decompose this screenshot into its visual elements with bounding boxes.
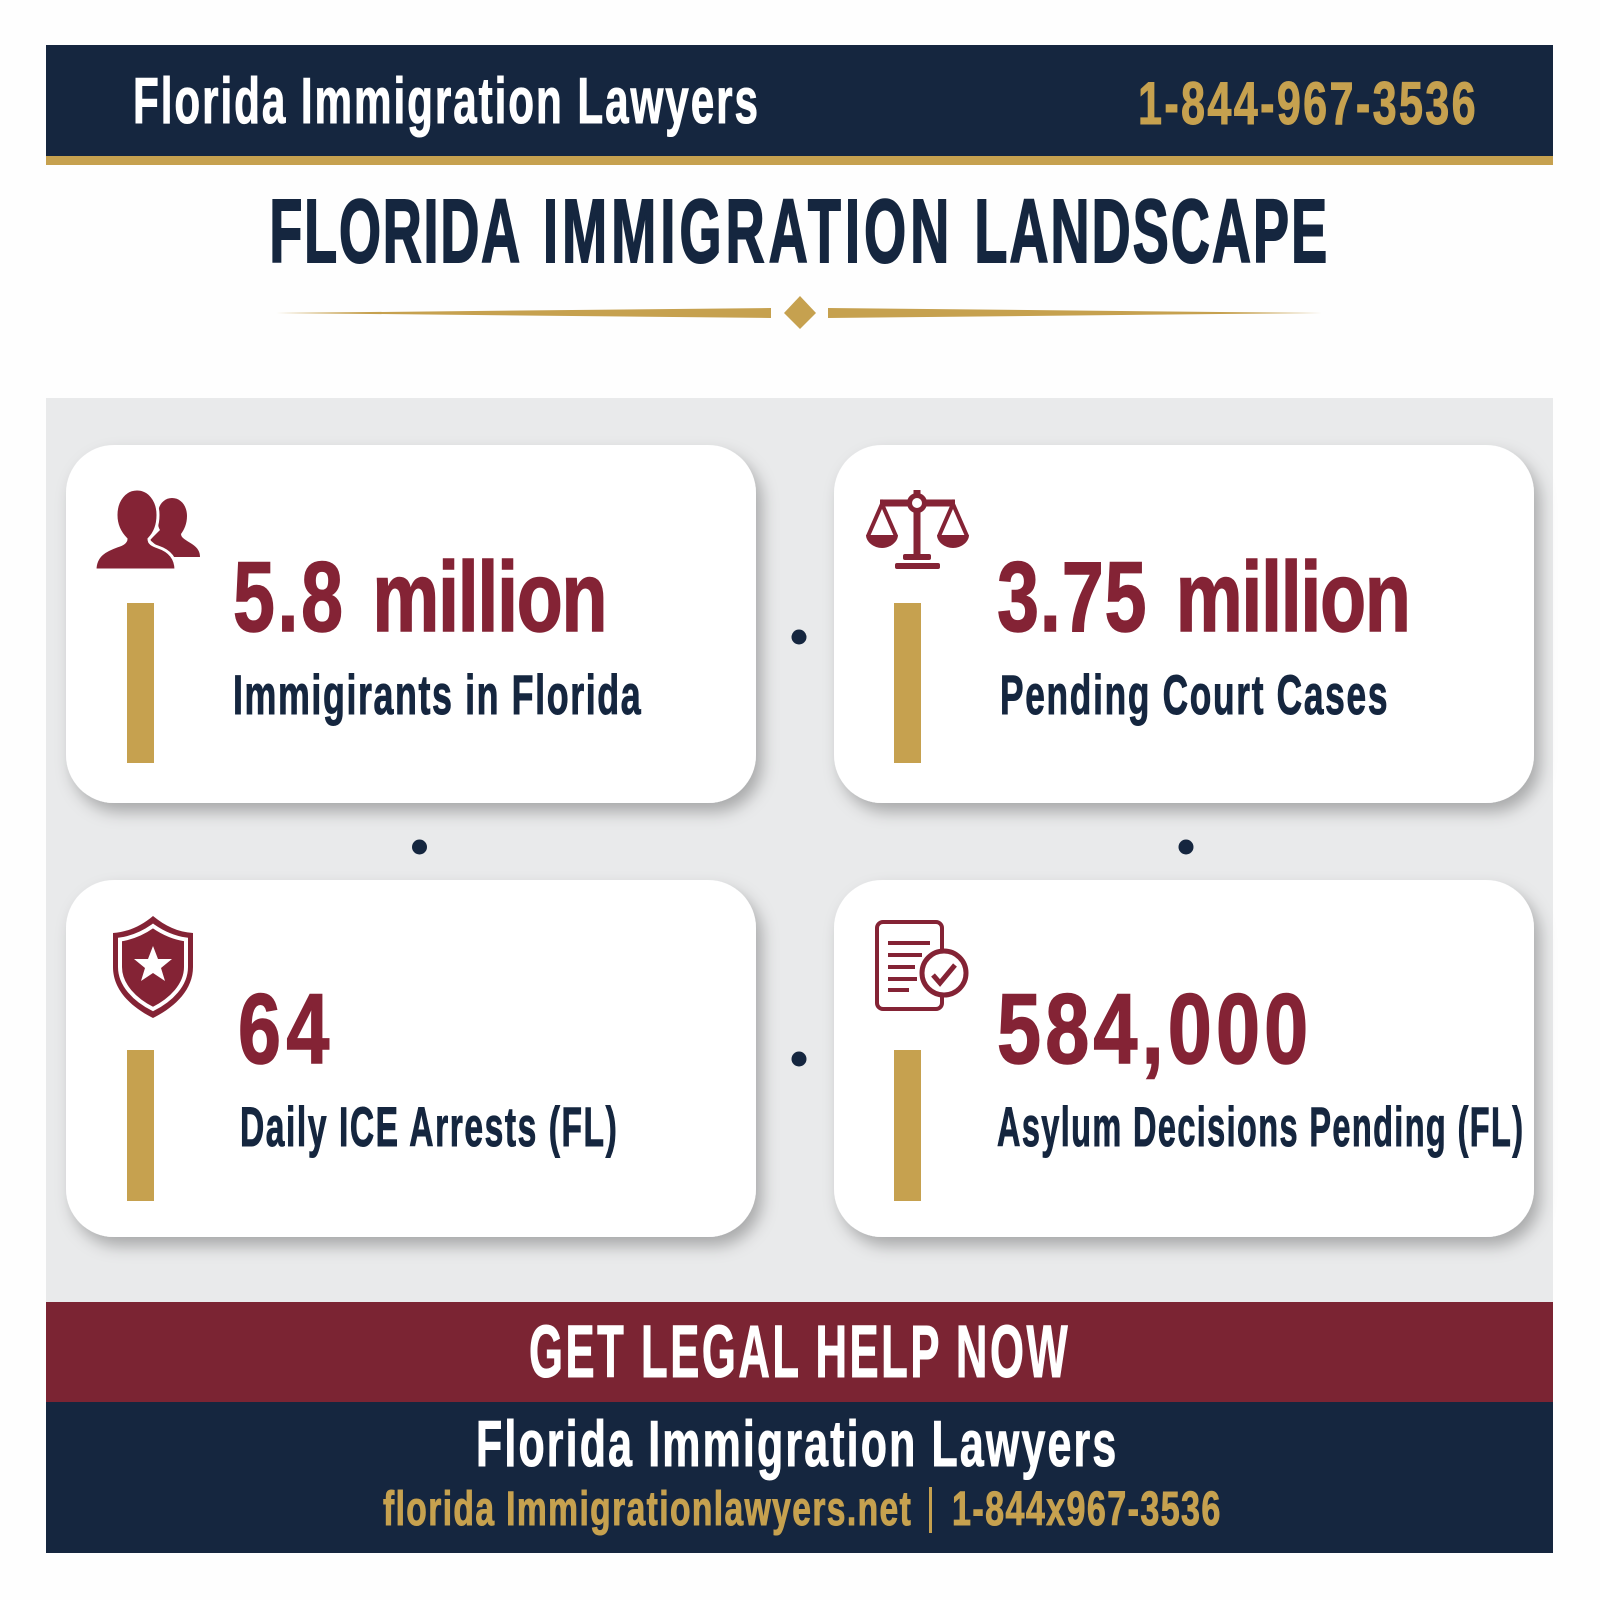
title: LANDSCAPE — [974, 181, 1329, 281]
stat value: 5.8 — [233, 541, 369, 652]
header gold rule — [46, 156, 1553, 165]
footer phone number: 1-844x967-3536 — [952, 1481, 1220, 1535]
gold bar — [127, 1050, 154, 1201]
header firm name: Florida Immigration Lawyers — [133, 64, 758, 137]
header band — [46, 45, 1553, 165]
call to action text: GET LEGAL HELP NOW — [529, 1310, 1068, 1393]
header phone number: 1-844-967-3536 — [1138, 71, 1476, 138]
footer band — [46, 1402, 1553, 1553]
icon: shield with star — [113, 916, 193, 1018]
stat label: Immigirants in Florida — [233, 663, 641, 726]
header background — [46, 45, 1553, 156]
card: pending court cases — [834, 445, 1534, 803]
stat label: Asylum Decisions Pending (FL) — [997, 1096, 1523, 1158]
card: immigrants in Florida — [66, 445, 756, 803]
footer firm name: Florida Immigration Lawyers — [476, 1407, 1116, 1480]
icon: people — [95, 489, 200, 570]
call to action band — [46, 1302, 1553, 1402]
stat label: Pending Court Cases — [1000, 664, 1387, 726]
footer separator — [929, 1487, 932, 1533]
card: asylum decisions pending — [834, 880, 1534, 1237]
footer website: florida Immigrationlawyers.net — [383, 1481, 911, 1535]
title divider — [276, 296, 1322, 329]
stat label: Daily ICE Arrests (FL) — [240, 1095, 617, 1158]
stat value: million — [1176, 541, 1410, 652]
title: FLORIDA — [269, 181, 537, 281]
stats panel — [46, 398, 1553, 1302]
card: daily ICE arrests — [66, 880, 756, 1237]
stat value: million — [372, 541, 606, 652]
gold bar — [894, 1050, 921, 1201]
title: IMMIGRATION — [543, 181, 973, 281]
panel background — [46, 398, 1553, 1302]
gold bar — [894, 603, 921, 763]
stat value: 584,000 — [997, 974, 1308, 1084]
icon: document with check — [877, 922, 966, 1009]
icon: scales of justice — [866, 490, 969, 569]
stat value: 3.75 — [997, 541, 1169, 652]
gold bar — [127, 603, 154, 763]
stat value: 64 — [238, 974, 329, 1084]
connector dots — [412, 630, 1194, 1066]
